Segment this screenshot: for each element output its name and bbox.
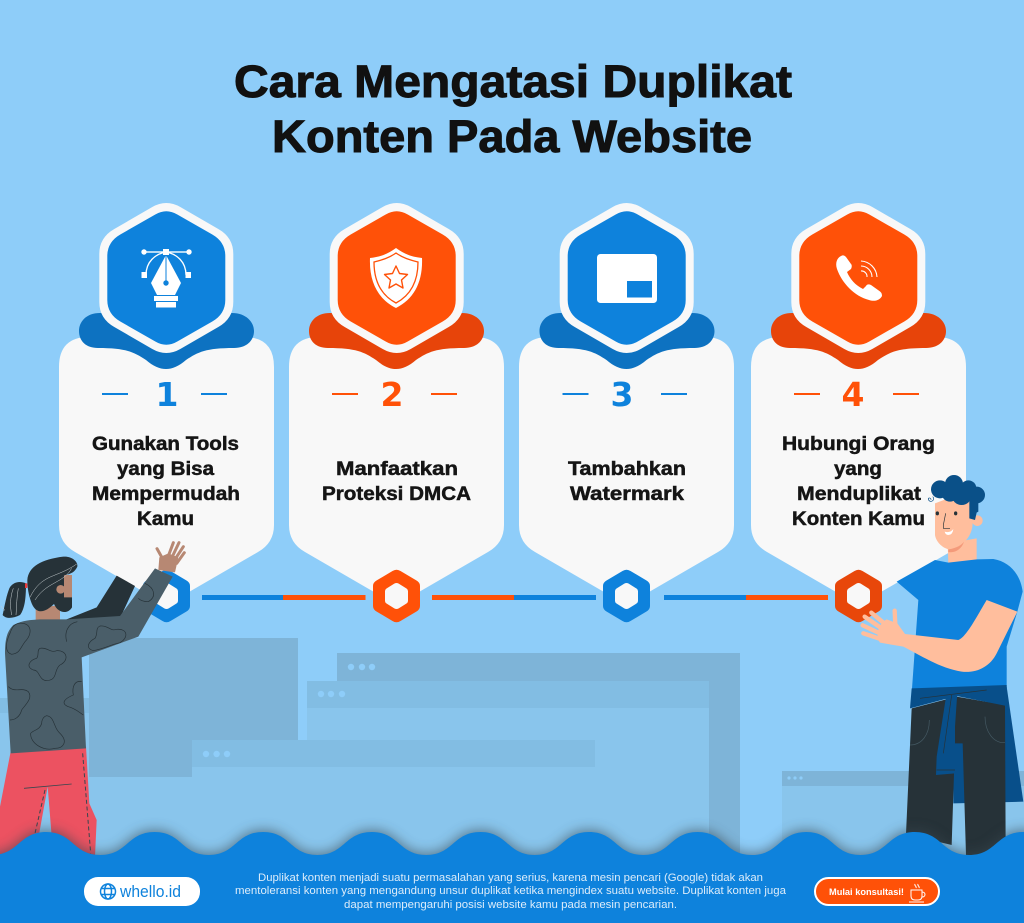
step 4 heading bbox=[782, 433, 935, 530]
step 4 heading: Konten Kamu bbox=[792, 508, 925, 530]
footer band bbox=[0, 832, 1024, 923]
step 1 heading bbox=[92, 433, 240, 530]
panel: step 2 bbox=[289, 203, 504, 605]
step 1 heading: Gunakan Tools bbox=[92, 433, 239, 455]
card 2 background bbox=[289, 337, 504, 605]
step 2 heading bbox=[322, 458, 471, 505]
footer description bbox=[235, 872, 787, 911]
icon: coffee cup bbox=[909, 884, 925, 902]
ribbon 1 bbox=[79, 313, 254, 369]
panel: step 1 bbox=[59, 203, 274, 605]
icon: pen tool bbox=[141, 249, 192, 308]
step 2 heading: Proteksi DMCA bbox=[322, 483, 471, 505]
background browser windows bbox=[0, 638, 1024, 923]
icon: globe bbox=[100, 884, 116, 899]
hexagon badge 2 bbox=[330, 203, 464, 353]
ribbon 3 bbox=[540, 313, 714, 369]
footer wave shadow bbox=[0, 830, 1024, 923]
number 4: 4 bbox=[842, 375, 864, 414]
footer description: Duplikat konten menjadi suatu permasalahan yang serius, karena mesin pencari (Google) tidak akan bbox=[258, 872, 763, 884]
title bbox=[234, 56, 792, 162]
timeline nodes bbox=[143, 570, 882, 622]
footer description: mentoleransi konten yang mengandung unsur duplikat ketika mengindex suatu website. Duplikat konten juga bbox=[235, 885, 787, 897]
consultation button bbox=[815, 878, 939, 905]
panel: step 4 bbox=[751, 203, 966, 605]
step 4 heading: Menduplikat bbox=[797, 483, 922, 505]
dashes 3 bbox=[562, 393, 687, 395]
illustration: man with ponytail bbox=[0, 543, 184, 857]
hexagon badge 3 bbox=[560, 203, 694, 353]
logo pill bbox=[84, 877, 200, 906]
dashes 2 bbox=[332, 393, 457, 395]
footer description: dapat mempengaruhi posisi website kamu pada mesin pencarian. bbox=[344, 899, 677, 911]
card 3 background bbox=[519, 337, 734, 605]
logo text: whello.id bbox=[119, 882, 181, 901]
step 4 heading: yang bbox=[834, 458, 882, 480]
dashes 1 bbox=[102, 393, 227, 395]
card 1 background bbox=[59, 337, 274, 605]
hexagon badge 4 bbox=[791, 203, 925, 353]
illustration: man in blue shirt bbox=[863, 475, 1023, 856]
icon: watermark bbox=[597, 254, 657, 303]
ribbon 4 bbox=[771, 313, 946, 369]
icon: shield star bbox=[370, 248, 422, 308]
panel: step 3 bbox=[519, 203, 734, 605]
step 3 heading bbox=[568, 458, 686, 505]
step 1 heading: Mempermudah bbox=[92, 483, 240, 505]
title: Konten Pada Website bbox=[272, 111, 752, 162]
card 4 background bbox=[751, 337, 966, 605]
step 3 heading: Watermark bbox=[570, 483, 684, 505]
icon: phone bbox=[836, 255, 882, 301]
step 2 heading: Manfaatkan bbox=[336, 458, 458, 480]
step 3 heading: Tambahkan bbox=[568, 458, 686, 480]
step 4 heading: Hubungi Orang bbox=[782, 433, 935, 455]
consultation button: Mulai konsultasi! bbox=[829, 887, 904, 898]
number 2: 2 bbox=[381, 375, 403, 414]
dashes 4 bbox=[794, 393, 919, 395]
hexagon badge 1 bbox=[99, 203, 233, 353]
connector lines bbox=[202, 595, 828, 600]
number 1: 1 bbox=[156, 375, 178, 414]
step 1 heading: yang Bisa bbox=[117, 458, 214, 480]
step 1 heading: Kamu bbox=[137, 508, 194, 530]
title: Cara Mengatasi Duplikat bbox=[234, 56, 792, 107]
number 3: 3 bbox=[611, 375, 633, 414]
ribbon 2 bbox=[309, 313, 484, 369]
